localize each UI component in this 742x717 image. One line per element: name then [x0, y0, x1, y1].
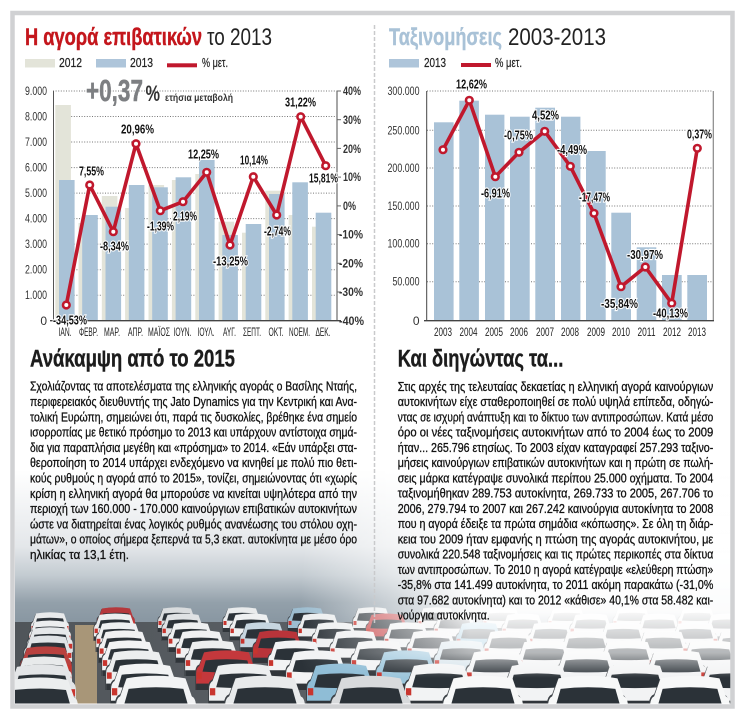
heading: recovery from 2015: Ανάκαμψη από το 2015 — [30, 346, 235, 373]
data labels: yearly %: -17,47% — [579, 190, 610, 205]
year labels: 2010 — [612, 327, 630, 339]
left axis labels: 2.000 — [25, 263, 47, 277]
year labels — [434, 327, 706, 339]
left axis labels: 0 — [413, 314, 420, 328]
right axis labels: 20% — [343, 142, 361, 156]
line: monthly % change — [63, 113, 329, 308]
legend: 2012, 2013, % change — [25, 56, 228, 70]
title: market 2013: το 2013 — [207, 24, 272, 51]
data labels: yearly %: -0,75% — [504, 128, 533, 143]
year labels: 2009 — [587, 327, 605, 339]
data labels: yearly %: -6,91% — [481, 185, 510, 200]
right axis labels — [339, 84, 364, 328]
right axis labels: 0% — [343, 199, 356, 213]
text block: recovery article — [30, 379, 357, 562]
month labels: ΦΕΒΡ. — [79, 327, 98, 339]
right axis labels: -10% — [339, 228, 363, 242]
year labels: 2007 — [536, 327, 554, 339]
text block: recovery article: κούς ρυθμούς η αγορά από το 2015», τονίζει, σημειώνοντας ότι «χωρίς — [30, 470, 357, 486]
title: registrations: Ταξινομήσεις — [389, 24, 502, 51]
data labels: yearly %: 12,62% — [456, 76, 487, 91]
left axis labels: 8.000 — [25, 110, 47, 124]
callout: +0.37% annual change — [86, 73, 233, 108]
month labels: ΙΟΥΛ. — [198, 327, 214, 339]
year labels: 2013 — [688, 327, 706, 339]
legend: 2013, % change: % μετ. — [495, 56, 522, 70]
left axis labels — [388, 84, 420, 328]
text block: recovery article: τολική Ευρώπη, σημειώνει ότι, παρά τις δυσκολίες, βρέθηκε ένα σημείο — [30, 409, 357, 424]
year labels: 2004 — [460, 327, 478, 339]
left axis labels: 7.000 — [25, 135, 47, 149]
data labels: monthly %: 31,22% — [285, 95, 316, 110]
title: registrations: 2003-2013 — [508, 24, 606, 51]
data labels: yearly %: 4,52% — [532, 108, 559, 123]
line: yearly % change — [440, 97, 701, 307]
legend: 2012, 2013, % change: 2012 — [59, 56, 82, 70]
text block: recovery article: κρίση η ελληνική αγορά θα μπορούσε να κινείται υψηλότερα από την — [30, 486, 357, 501]
text block: recovery article: ώστε να διατηρείται ένας λογικός ρυθμός ανανέωσης του στόλου οχη- — [30, 516, 357, 531]
month labels — [58, 327, 330, 339]
text block: recovery article: μάτων», ο οποίος σήμερα ξεπερνά τα 5,3 εκατ. αυτοκίνητα με μέσο όρο — [30, 532, 357, 547]
month labels: ΜΑΡ. — [104, 327, 120, 339]
data labels: monthly %: 20,96% — [121, 121, 154, 136]
month labels: ΑΥΓ. — [223, 327, 236, 339]
month labels: ΟΚΤ. — [268, 327, 284, 339]
bars: 2012 — [55, 105, 328, 321]
data labels: monthly %: 12,25% — [188, 146, 219, 161]
month labels: ΝΟΕΜ. — [289, 327, 310, 339]
chart: monthly registrations and % change — [25, 73, 364, 339]
year labels: 2012 — [663, 327, 681, 339]
right axis labels: 10% — [343, 170, 361, 184]
left axis labels: 1.000 — [25, 288, 47, 302]
data labels: yearly %: 0,37% — [687, 126, 712, 141]
data labels: yearly %: -4,49% — [557, 142, 587, 157]
text block: recovery article: περιφερειακός διευθυντής της Jato Dynamics για την Κεντρική και Ανα- — [30, 394, 357, 409]
data labels: monthly %: -8,34% — [100, 239, 129, 254]
month labels: ΔΕΚ. — [316, 327, 330, 339]
left axis labels: 300.000 — [388, 84, 420, 98]
data labels: monthly %: 15,81% — [309, 170, 338, 185]
text block: recovery article: ισορροπίας με θετικό πρόσημο το 2013 και υπάρχουν αντίστοιχα σημά- — [30, 425, 357, 440]
panel: registrations 2003-2013 chart — [388, 24, 714, 339]
text block: recovery article: θεροποίηση το 2014 υπάρχει ενδεχόμενο να κινηθεί με πολύ πιο θετι- — [30, 455, 357, 470]
month labels: ΣΕΠΤ. — [243, 327, 261, 339]
month labels: ΙΟΥΝ. — [174, 327, 192, 339]
text block: recovery article: ηλικίας τα 13,1 έτη. — [30, 547, 129, 562]
left axis labels: 50.000 — [392, 275, 420, 289]
month labels: ΙΑΝ. — [58, 327, 72, 339]
right axis labels: 30% — [343, 113, 361, 127]
legend: 2012, 2013, % change: % μετ. — [202, 56, 228, 70]
callout: +0.37% annual change: % — [146, 81, 160, 106]
month labels: ΑΠΡ. — [128, 327, 143, 339]
year labels: 2006 — [510, 327, 528, 339]
left axis labels: 4.000 — [25, 212, 47, 226]
data labels: monthly %: -1,39% — [147, 219, 174, 234]
left axis labels: 150.000 — [388, 199, 420, 213]
right axis labels: -20% — [339, 256, 363, 270]
year labels: 2008 — [561, 327, 579, 339]
right axis labels: -40% — [339, 314, 364, 328]
bars: 2013 — [59, 160, 331, 321]
left axis labels: 100.000 — [388, 237, 420, 251]
heading: and telling them: Και διηγώντας τα... — [398, 346, 563, 373]
data labels: yearly %: -40,13% — [653, 305, 688, 320]
year labels: 2011 — [638, 327, 656, 339]
callout: +0.37% annual change: +0,37 — [86, 73, 143, 108]
chart: yearly registrations and % change — [388, 76, 714, 339]
data labels: monthly % — [53, 95, 338, 328]
data labels: monthly %: -34,53% — [53, 312, 87, 328]
text block: recovery article: Σχολιάζοντας τα αποτελέσματα της ελληνικής αγοράς ο Βασίλης Νταής, — [30, 379, 357, 394]
year labels: 2005 — [485, 327, 503, 339]
left axis labels: 0 — [40, 314, 47, 328]
text block: history article — [398, 379, 714, 623]
left axis labels — [25, 84, 47, 328]
right axis labels: 40% — [343, 84, 361, 98]
data labels: yearly % — [456, 76, 712, 320]
left axis labels: 200.000 — [388, 161, 420, 175]
data labels: yearly %: -30,97% — [627, 247, 663, 262]
left axis labels: 6.000 — [25, 161, 47, 175]
callout: +0.37% annual change: ετήσια μεταβολή — [165, 93, 233, 104]
center dashed divider — [374, 25, 376, 625]
bars: yearly registrations — [434, 101, 707, 321]
right axis labels: -30% — [339, 285, 363, 299]
text block: recovery article: δια για παραπλήσια μεγέθη και «πρόσημα» το 2014. «Εάν υπάρξει στα- — [30, 440, 357, 455]
year labels: 2003 — [434, 327, 452, 339]
data labels: monthly %: -2,74% — [264, 224, 291, 239]
data labels: yearly %: -35,84% — [601, 296, 638, 311]
data labels: monthly %: 7,55% — [79, 164, 104, 179]
data labels: monthly %: 10,14% — [240, 153, 268, 168]
text block: recovery article: περιοχή των 160.000 - 170.000 καινούργιων επιβατικών αυτοκινήτων — [30, 501, 357, 516]
month labels: ΜΑΪΟΣ — [148, 327, 170, 339]
panel: passenger car market 2013 chart — [25, 24, 364, 339]
legend: 2013, % change: 2013 — [424, 56, 446, 70]
left axis labels: 9.000 — [25, 84, 47, 98]
left axis labels: 3.000 — [25, 237, 47, 251]
title: market 2013: Η αγορά επιβατικών — [25, 24, 202, 51]
left axis labels: 250.000 — [388, 123, 420, 137]
legend: 2012, 2013, % change: 2013 — [130, 56, 153, 70]
data labels: monthly %: 2,19% — [173, 209, 197, 224]
photo: cars parked at the port with sea behind — [15, 493, 730, 704]
text block: history article: νούργια αυτοκίνητα. — [398, 608, 490, 623]
left axis labels: 5.000 — [25, 186, 47, 200]
data labels: monthly %: -13,25% — [213, 254, 248, 269]
legend: 2013, % change — [389, 56, 522, 70]
